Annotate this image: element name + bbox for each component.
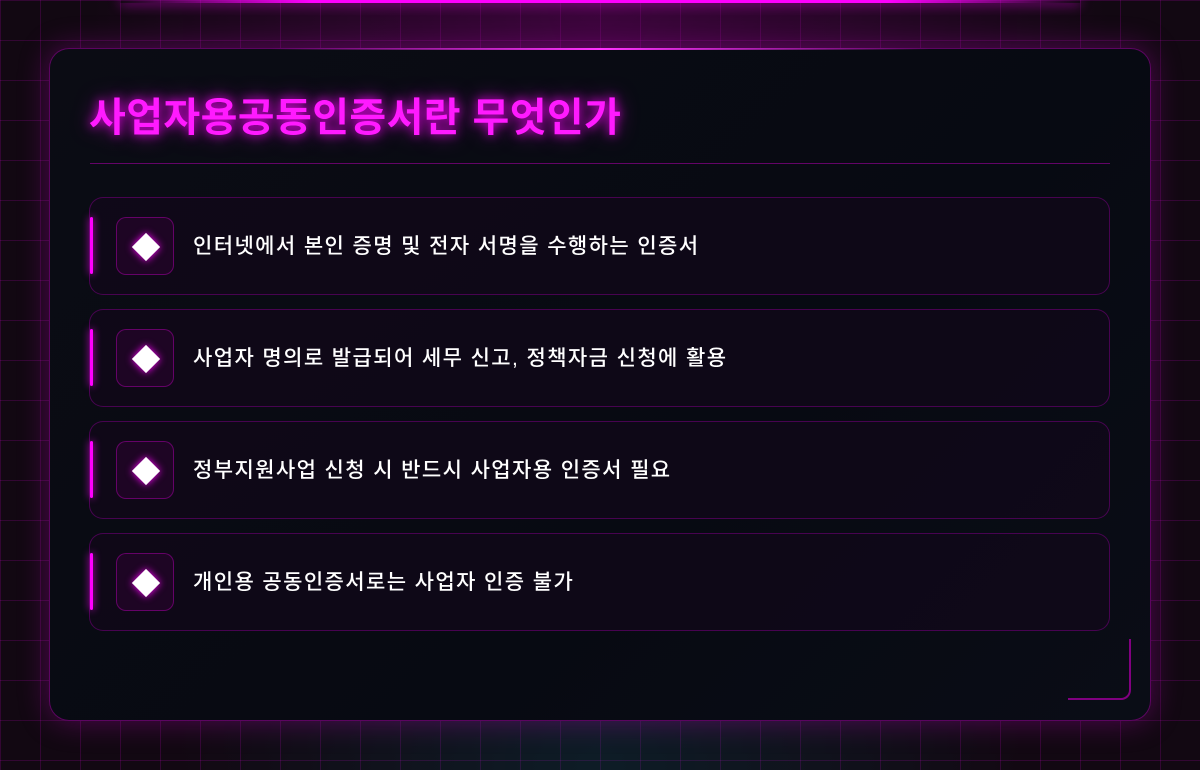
icon: diamond (116, 329, 174, 387)
text 4: 개인용 공동인증서로는 사업자 인증 불가 (193, 571, 574, 594)
item 1 (89, 197, 1110, 295)
icon: diamond (116, 553, 174, 611)
icon: diamond (116, 441, 174, 499)
icon: diamond (116, 217, 174, 275)
text 1: 인터넷에서 본인 증명 및 전자 서명을 수행하는 인증서 (193, 235, 699, 258)
item 4 (89, 533, 1110, 631)
corner accent (1068, 639, 1131, 700)
item 2 (89, 309, 1110, 407)
text 3: 정부지원사업 신청 시 반드시 사업자용 인증서 필요 (193, 459, 672, 482)
text 2: 사업자 명의로 발급되어 세무 신고, 정책자금 신청에 활용 (193, 347, 727, 370)
item 3 (89, 421, 1110, 519)
title: 사업자용공동인증서란 무엇인가 (89, 96, 621, 140)
